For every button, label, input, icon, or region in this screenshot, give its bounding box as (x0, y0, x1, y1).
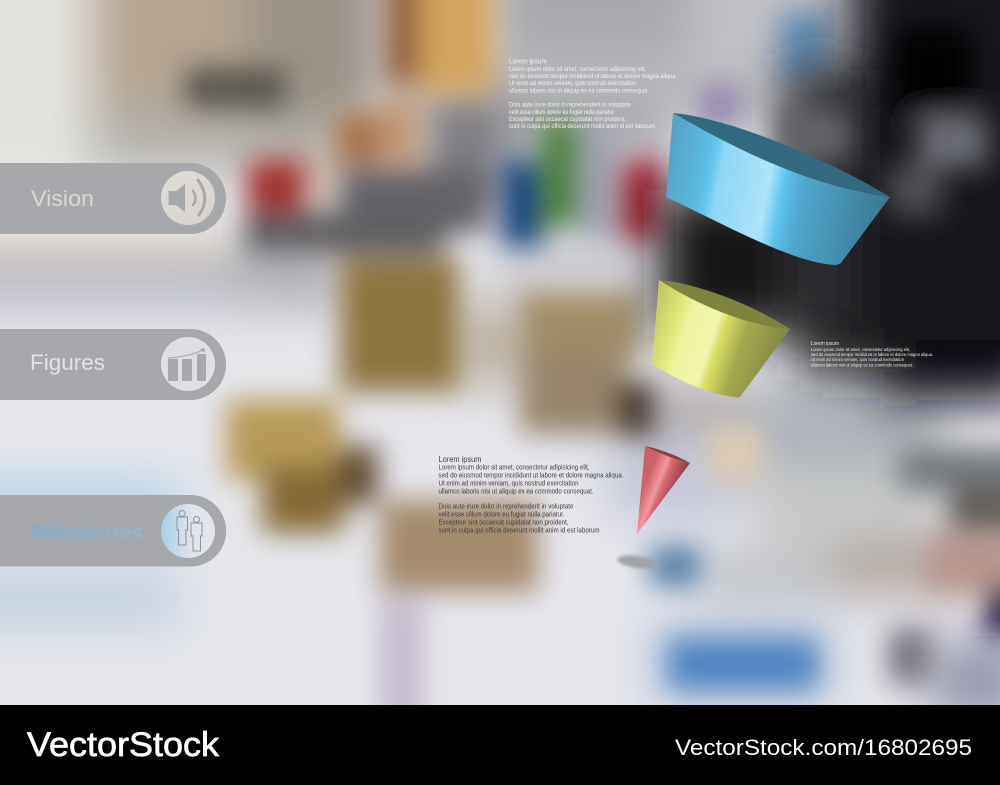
text block: lower left: Duis aute irure dolor in reprehenderit in voluptate (438, 504, 574, 510)
cone segment: yellow middle (652, 280, 790, 398)
text block: top (509, 58, 677, 130)
footer bar (0, 705, 1000, 785)
panel: Vision pill (0, 163, 226, 234)
text block: lower left: sed do eiusmod tempor incididunt ut labore et dolore magna aliqua. (438, 472, 624, 480)
cone segment: red tip (637, 446, 690, 534)
text block: lower left: sunt in culpa qui officia deserunt mollit anim id est laborum (438, 528, 600, 534)
text block: top: Lorem ipsum (509, 58, 547, 66)
text block: top: velit esse cillum dolore eu fugiat nulla pariatur. (509, 110, 615, 116)
text block: top: Duis aute irure dolor in reprehenderit in voluptate (509, 102, 632, 108)
icon: people (161, 504, 215, 558)
text block: middle right: ullamco laboris nisi ut aliquip ex ea commodo consequat. (811, 362, 913, 368)
text block: middle right: Lorem ipsum (811, 341, 839, 347)
text block: top: sunt in culpa qui officia deserunt mollit anim id est laborum (509, 124, 655, 130)
text block: lower left: Lorem ipsum dolor sit amet, consectetur adipisicing elit, (438, 464, 590, 472)
text block: lower left: velit esse cillum dolore eu fugiat nulla pariatur. (438, 512, 565, 518)
Figures label: Figures (30, 350, 105, 375)
text block: top: Ut enim ad minim veniam, quis nostrud exercitation (509, 81, 636, 87)
icon: bar chart (161, 337, 215, 391)
text block: middle right: Lorem ipsum dolor sit amet, consectetur adipisicing elit, (811, 347, 910, 352)
text block: lower left: Lorem ipsum (438, 455, 482, 464)
text block: lower left: Ut enim ad minim veniam, quis nostrud exercitation (438, 480, 579, 488)
brand wordmark: VectorStock (27, 726, 220, 764)
text block: lower left (438, 455, 624, 534)
text block: top: Excepteur sint occaecat cupidatat non proident, (509, 117, 626, 123)
Vision label: Vision (31, 186, 94, 211)
text block: middle right: Ut enim ad minim veniam, quis nostrud exercitation (811, 357, 904, 362)
cone segment: blue top (666, 113, 890, 265)
text block: lower left: ullamco laboris nisi ut aliquip ex ea commodo consequat. (438, 488, 594, 496)
text block: middle right: sed do eiusmod tempor incididunt ut labore et dolore magna aliqua. (811, 352, 933, 357)
Milestones label: Milestones (31, 520, 143, 545)
text block: middle right (811, 341, 933, 368)
text block: lower left: Excepteur sint occaecat cupidatat non proident, (438, 520, 569, 526)
panel: Figures pill (0, 329, 226, 400)
icon: speaker (161, 171, 215, 225)
panel: Milestones pill (0, 495, 226, 566)
image id: VectorStock.com/16802695 (675, 735, 972, 760)
text block: top: ullamco laboris nisi ut aliquip ex ea commodo consequat. (509, 88, 649, 94)
text block: top: Lorem ipsum dolor sit amet, consectetur adipisicing elit, (509, 67, 646, 73)
cone shadow (616, 553, 660, 571)
text block: top: sed do eiusmod tempor incididunt ut labore et dolore magna aliqua. (509, 74, 677, 80)
